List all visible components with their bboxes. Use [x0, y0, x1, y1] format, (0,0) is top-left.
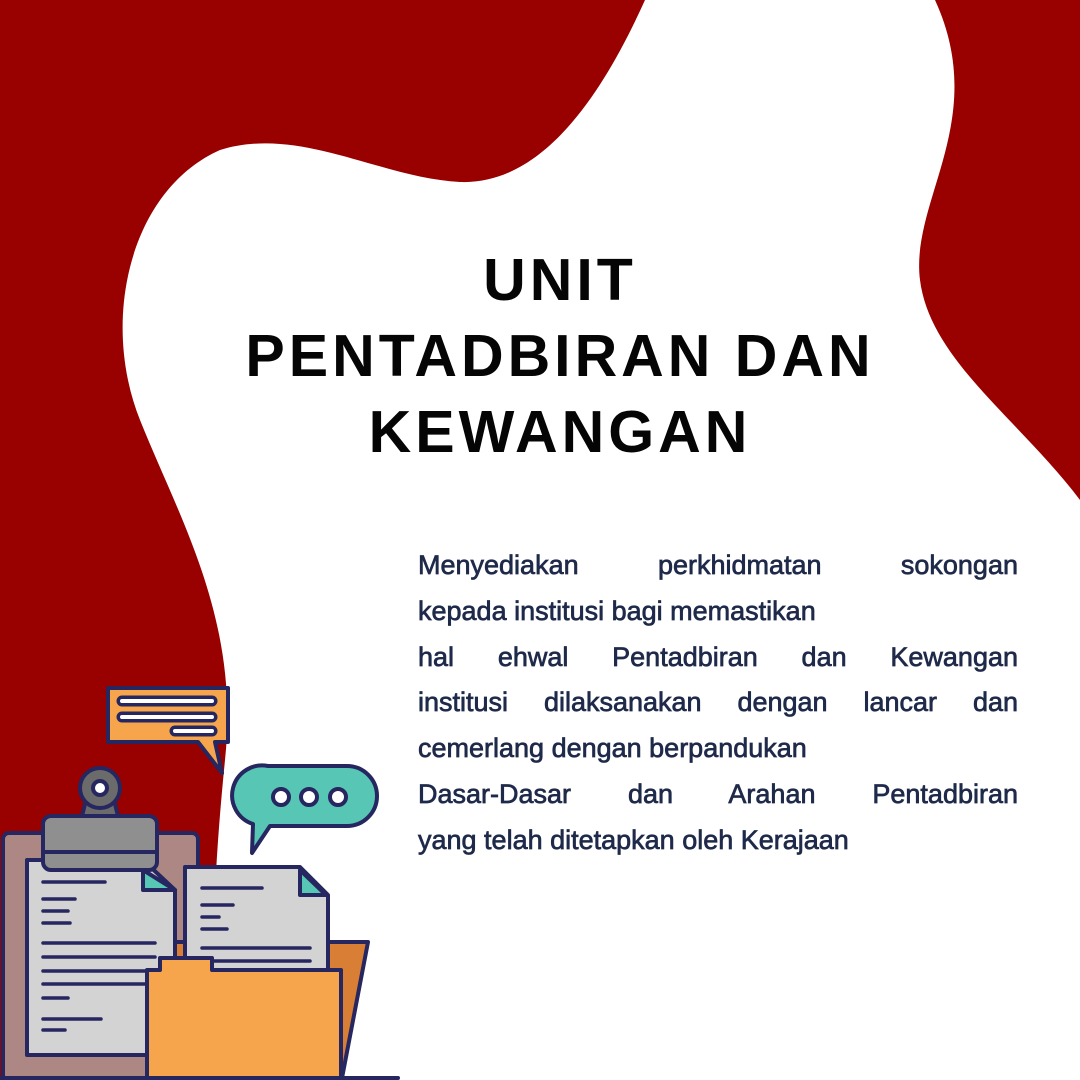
description text: Dasar-Dasar dan Arahan Pentadbiran: [418, 779, 1018, 809]
description text: Menyediakan perkhidmatan sokongan: [418, 550, 1018, 580]
title: KEWANGAN: [369, 399, 751, 465]
folder with document: [147, 867, 368, 1078]
description text: cemerlang dengan berpandukan: [418, 733, 807, 763]
icon: orange speech bubble: [108, 688, 228, 773]
title: PENTADBIRAN DAN: [245, 323, 875, 389]
icon: teal speech bubble: [232, 765, 377, 853]
title: [245, 247, 875, 465]
description text: hal ehwal Pentadbiran dan Kewangan: [418, 642, 1018, 672]
title: UNIT: [483, 247, 637, 313]
description text: kepada institusi bagi memastikan: [418, 596, 816, 626]
description text: [418, 550, 1018, 855]
clipboard: [3, 768, 198, 1080]
description text: institusi dilaksanakan dengan lancar dan: [418, 687, 1018, 717]
description text: yang telah ditetapkan oleh Kerajaan: [418, 825, 849, 855]
